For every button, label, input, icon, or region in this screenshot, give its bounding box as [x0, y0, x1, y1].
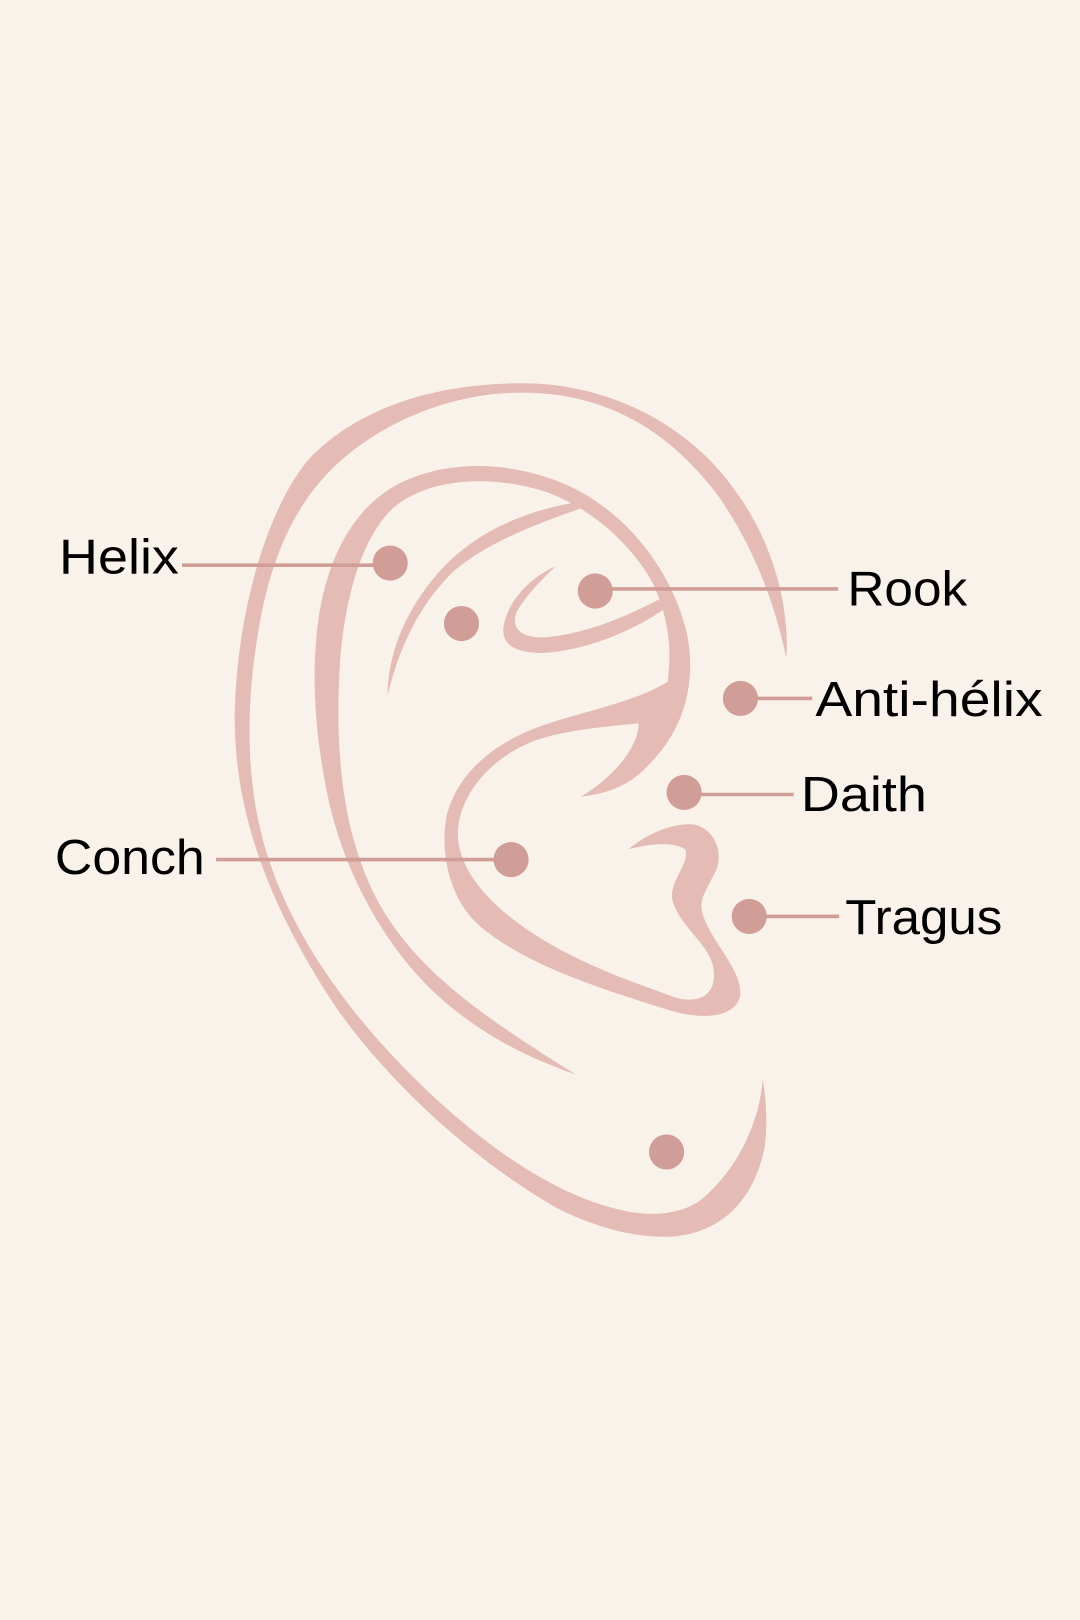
line: daith — [698, 793, 794, 796]
ear illustration — [235, 383, 787, 1237]
dot: helix — [373, 546, 408, 581]
inner helix fold — [388, 503, 581, 695]
label: Helix: Helix — [59, 528, 179, 584]
label: Tragus: Tragus — [845, 889, 1002, 945]
dot: inner fold — [444, 606, 479, 641]
label: Conch: Conch — [55, 829, 205, 885]
line: rook — [610, 587, 838, 591]
line: anti-helix — [754, 697, 812, 700]
dot: anti-helix — [723, 681, 758, 716]
line: tragus — [763, 915, 839, 918]
line: helix — [182, 563, 377, 567]
label: Daith: Daith — [801, 766, 927, 822]
label: Rook: Rook — [847, 560, 967, 616]
rook fold — [503, 566, 663, 653]
piercing dots — [373, 546, 767, 1170]
outer helix and lobe — [235, 383, 787, 1237]
dot: daith — [667, 775, 702, 810]
connector lines — [182, 565, 839, 916]
label: Anti-hélix: Anti-hélix — [815, 671, 1043, 727]
dot: rook — [578, 573, 613, 609]
line: conch — [216, 858, 496, 861]
dot: lobe — [649, 1134, 684, 1170]
dot: conch — [494, 842, 529, 877]
dot: tragus — [732, 899, 767, 934]
antihelix, conch and tragus — [315, 466, 740, 1074]
